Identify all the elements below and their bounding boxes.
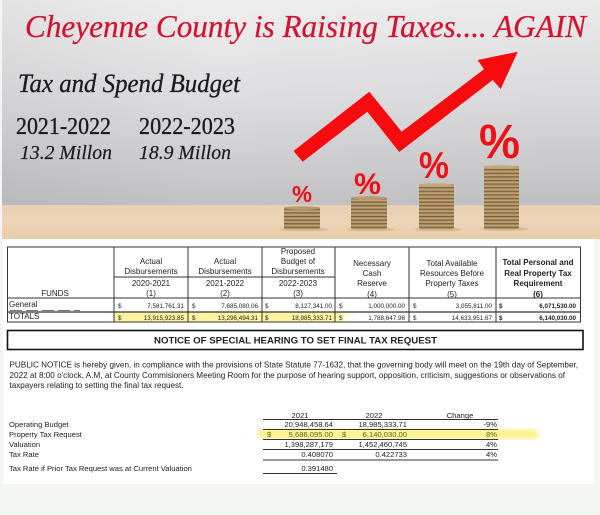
comparison rules: [263, 420, 498, 474]
notice heading box: [8, 330, 583, 350]
table column headers: (3): [293, 289, 303, 298]
table row: general: $: [265, 303, 269, 310]
table row: general: $: [413, 303, 417, 310]
comparison values: 6,140,030.00: [363, 430, 407, 439]
table column headers: Disbursements: [271, 267, 325, 276]
icon: coin stacks with percent signs: %: [479, 116, 520, 169]
table column headers: Total Available: [426, 259, 478, 268]
table column headers: Disbursements: [124, 267, 178, 276]
table row: totals: $: [339, 315, 343, 322]
table row: general: $: [499, 303, 503, 310]
comparison values: 0.422733: [375, 450, 407, 459]
table row: totals: TOTALS: [9, 312, 39, 321]
comparison values: 18,985,333.71: [358, 420, 407, 429]
icon: coin stacks with percent signs: %: [354, 168, 381, 201]
comparison values: 0.391480: [301, 464, 333, 473]
comparison row labels: Tax Rate: [9, 450, 39, 459]
table grid: [7, 247, 581, 322]
table column headers: 2022-2023: [279, 279, 318, 288]
arrow: rising trend: [294, 52, 518, 162]
public notice paragraph: taxpayers relating to setting the final tax request.: [10, 380, 184, 390]
table column headers: (1): [146, 289, 156, 298]
comparison row labels: Property Tax Request: [9, 430, 83, 439]
public notice paragraph: PUBLIC NOTICE is hereby given, in compliance with the provisions of State Statute 77-1632, that the governing body will meet on the 19th day of September,: [10, 360, 578, 370]
table row: general: $: [339, 303, 343, 310]
table row: totals: 13,296,494.31: [218, 315, 258, 322]
budget figures: 13.2 Millon: [20, 142, 112, 164]
comparison values: 1,452,460,745: [358, 440, 407, 449]
budget figures: 2022-2023: [139, 114, 235, 140]
comparison table: [9, 411, 538, 474]
comparison values: 4%: [486, 450, 497, 459]
table row: general: 3,055,811.00: [456, 303, 492, 310]
comparison values: $: [342, 430, 347, 439]
comparison values: 1,398,287,179: [284, 440, 333, 449]
icon: coin stacks with percent signs: %: [419, 145, 449, 186]
table row: general: 1,000,000.00: [368, 303, 405, 310]
table column headers: Total Personal and: [503, 258, 574, 267]
budget figures: [16, 114, 235, 164]
table column headers: [41, 247, 574, 299]
comparison values: 5,686,095.00: [289, 430, 333, 439]
comparison values: -9%: [483, 420, 497, 429]
table column headers: 2020-2021: [132, 279, 171, 288]
table column headers: Actual: [214, 257, 236, 266]
table row: totals: 1,788,647.96: [368, 315, 405, 322]
table row: general: [9, 300, 576, 310]
table column headers: Property Taxes: [425, 279, 479, 288]
table column headers: Disbursements: [198, 267, 252, 276]
table row: totals: $: [265, 315, 269, 322]
table column headers: Reserve: [357, 279, 387, 288]
public notice paragraph: [10, 360, 578, 390]
table row: general: General: [9, 300, 38, 309]
table row: general: 8,127,341.00: [295, 303, 332, 310]
table column headers: Proposed: [281, 247, 315, 256]
comparison values: 0.408070: [301, 450, 333, 459]
table highlights: [114, 312, 363, 322]
table row: general: 6,071,530.00: [539, 303, 576, 310]
table column headers: FUNDS: [41, 289, 69, 298]
comparison values: Change: [447, 411, 473, 420]
comparison values: [267, 411, 497, 473]
panel: document background: [3, 239, 594, 484]
comparison values: 4%: [486, 440, 497, 449]
table column headers: Requirement: [514, 279, 563, 288]
table row: general: $: [192, 303, 196, 310]
table row: totals: 18,985,333.71: [292, 315, 332, 322]
table column headers: (2): [220, 289, 230, 298]
table row: totals: $: [499, 315, 503, 322]
table column headers: (4): [367, 290, 377, 299]
property tax highlight: [258, 429, 538, 439]
table row: totals: [9, 312, 576, 322]
table column headers: (5): [447, 290, 457, 299]
comparison row labels: Valuation: [9, 440, 40, 449]
budget figures: 18.9 Millon: [139, 142, 231, 164]
table row: totals: $: [192, 315, 196, 322]
table column headers: Resources Before: [420, 269, 485, 278]
comparison row labels: Tax Rate if Prior Tax Request was at Current Valuation: [9, 464, 192, 473]
comparison values: 20,948,458.64: [284, 420, 333, 429]
table column headers: Real Property Tax: [504, 269, 572, 278]
icon: coin stacks with percent signs: [280, 116, 528, 231]
table column headers: Actual: [140, 257, 162, 266]
public notice paragraph: 2022 at 8:00 o'clock, A.M, at County Commisioners Meeting Room for the purpose of hearing support, opposition, criticism, suggestions or observations of: [10, 370, 566, 380]
table column headers: (6): [533, 290, 543, 299]
comparison row labels: Operating Budget: [9, 420, 69, 429]
table row: totals: $: [118, 315, 122, 322]
icon: coin stacks with percent signs: %: [292, 181, 312, 207]
comparison values: 2021: [292, 411, 308, 420]
comparison row labels: [9, 420, 192, 473]
budget figures: 2021-2022: [16, 114, 111, 140]
comparison values: 8%: [486, 430, 497, 439]
comparison values: 2022: [366, 411, 382, 420]
table row: totals: $: [413, 315, 417, 322]
title: Cheyenne County is Raising Taxes.... AGAIN: [25, 8, 588, 44]
table: funds budget: [7, 247, 581, 322]
table column headers: Budget of: [281, 257, 316, 266]
table column headers: Necessary: [353, 259, 391, 268]
comparison values: $: [267, 430, 272, 439]
table row: general: 7,685,080.06: [221, 303, 258, 310]
table column headers: 2021-2022: [206, 279, 245, 288]
table row: totals: 14,633,951.67: [452, 315, 492, 322]
table row: totals: 13,915,923.85: [144, 315, 184, 322]
table column headers: Cash: [363, 269, 381, 278]
table row: general: $: [118, 303, 122, 310]
notice heading box: NOTICE OF SPECIAL HEARING TO SET FINAL TAX REQUEST: [154, 336, 437, 346]
table row: totals: 6,140,030.00: [539, 315, 576, 322]
table row: general: 7,581,761.31: [147, 303, 184, 310]
heading: tax and spend budget: Tax and Spend Budget: [18, 69, 241, 98]
photo background: [0, 0, 600, 240]
